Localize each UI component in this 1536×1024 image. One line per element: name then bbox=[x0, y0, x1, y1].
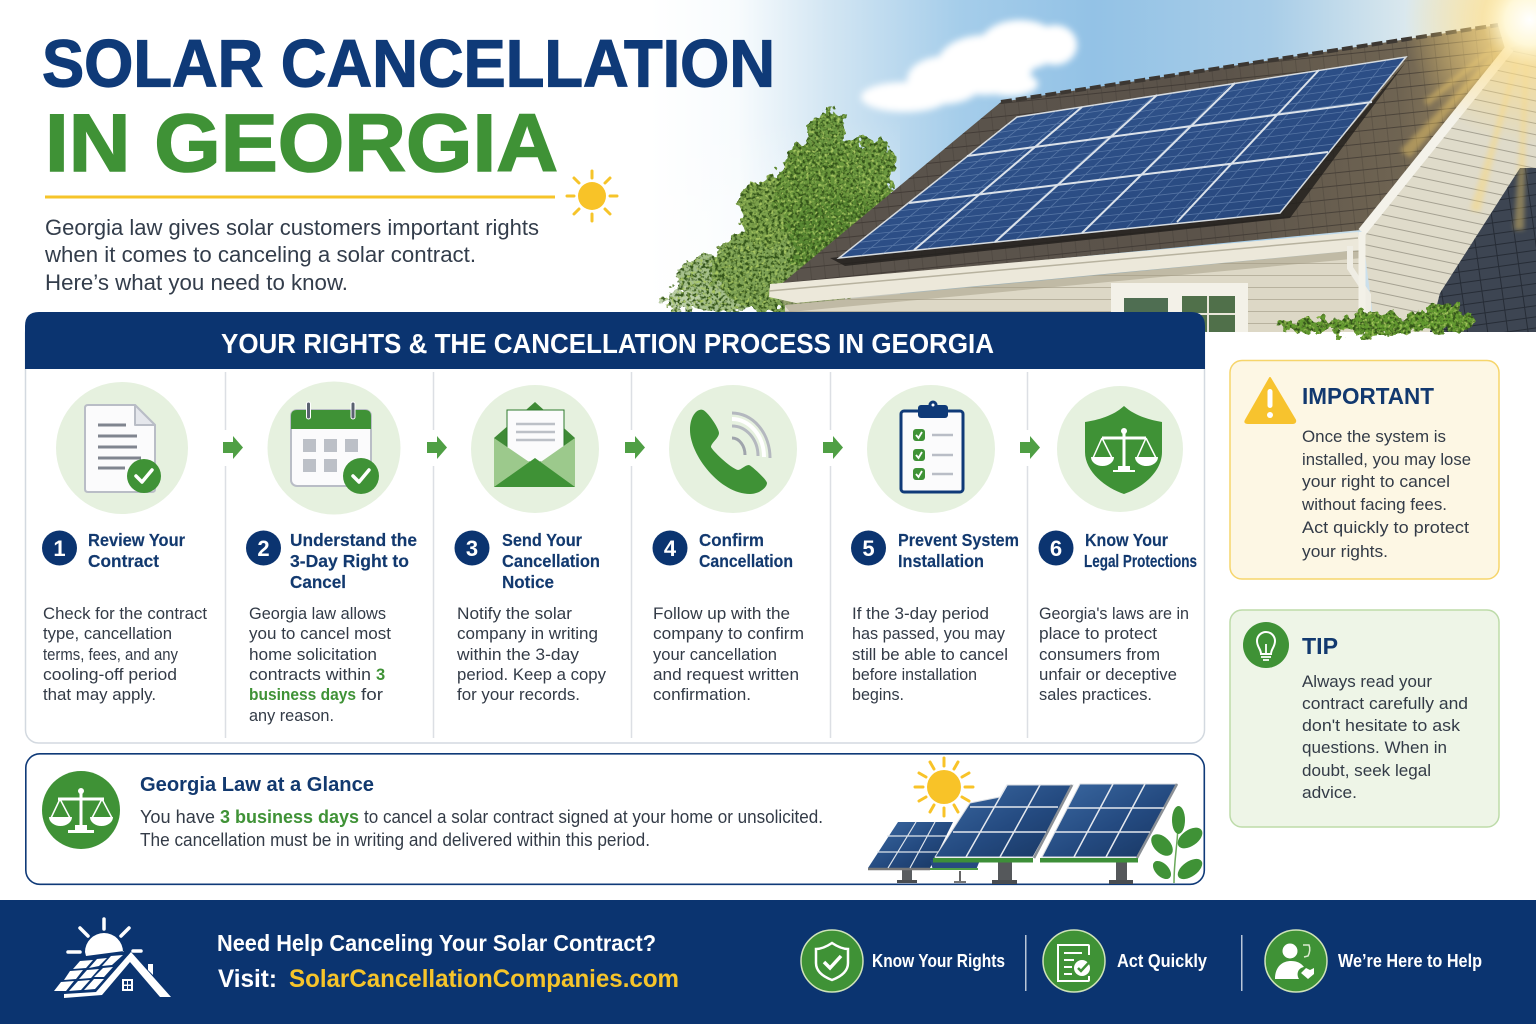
step 3 text bbox=[456, 605, 607, 704]
step 2 heading bbox=[290, 530, 417, 592]
important text: your rights. bbox=[1302, 542, 1388, 561]
step number 6 bbox=[1038, 530, 1074, 566]
middle panel bbox=[933, 785, 1073, 884]
important text: Act quickly to protect bbox=[1302, 518, 1469, 537]
step 6: know your legal protections bbox=[1038, 386, 1197, 704]
glance heading: Georgia Law at a Glance bbox=[140, 774, 374, 796]
important box bbox=[1230, 360, 1499, 579]
step 2 heading: Understand the bbox=[290, 530, 417, 550]
step 3 heading: Cancellation bbox=[502, 551, 600, 571]
step 3 heading bbox=[502, 530, 600, 592]
step 4 text bbox=[653, 605, 804, 704]
important text bbox=[1301, 427, 1471, 561]
plant bbox=[1147, 806, 1206, 883]
glance text: The cancellation must be in writing and delivered within this period. bbox=[140, 830, 650, 850]
gable siding bbox=[1362, 40, 1536, 332]
window bbox=[1111, 283, 1248, 332]
card body bbox=[26, 320, 1204, 743]
icon: small sun bbox=[567, 171, 617, 221]
step 1 text: Check for the contract bbox=[43, 605, 207, 623]
small panel bbox=[868, 822, 980, 883]
step number 1 bbox=[42, 530, 77, 566]
glance text: to cancel a solar contract signed at your home or unsolicited. bbox=[364, 807, 823, 827]
step 3 text: company in writing bbox=[457, 625, 598, 643]
footer call to action bbox=[217, 930, 679, 993]
footer badge: we're here to help bbox=[1265, 930, 1482, 992]
icon: solar house logo bbox=[54, 919, 171, 998]
panel: rights and cancellation process bbox=[25, 312, 1205, 743]
step 3 text: period. Keep a copy bbox=[457, 666, 607, 684]
step number 4 bbox=[652, 530, 688, 566]
panel: Georgia law at a glance bbox=[26, 754, 1206, 884]
step number 6: 6 bbox=[1050, 536, 1062, 561]
step 4 text: and request written bbox=[653, 666, 799, 684]
important heading: IMPORTANT bbox=[1302, 383, 1434, 409]
step 2 text: you to cancel most bbox=[249, 625, 391, 643]
step 4 text: company to confirm bbox=[653, 625, 804, 643]
icon: shield with scales bbox=[1057, 386, 1183, 512]
intro text: Here’s what you need to know. bbox=[45, 270, 348, 295]
step 3 text: Notify the solar bbox=[457, 605, 573, 623]
glance box bbox=[26, 754, 1204, 884]
house wall bbox=[780, 246, 1362, 332]
main roof bbox=[780, 25, 1506, 285]
step 4 text: Follow up with the bbox=[653, 605, 790, 623]
icon: clipboard checklist bbox=[867, 385, 995, 513]
step 1 heading bbox=[88, 530, 185, 571]
step 4 text: your cancellation bbox=[653, 646, 777, 664]
step 2 text: for bbox=[361, 686, 384, 704]
step 6 heading: Legal Protections bbox=[1084, 551, 1197, 571]
illustration: solar panels with sun and plant bbox=[868, 758, 1206, 884]
step 5 text bbox=[852, 605, 1008, 704]
step 5 heading bbox=[898, 530, 1019, 571]
step 3 text: within the 3-day bbox=[456, 646, 580, 664]
step 2 heading: Cancel bbox=[290, 572, 346, 592]
step 2 text: contracts within bbox=[249, 666, 371, 684]
step number 1: 1 bbox=[53, 536, 66, 561]
solar array bbox=[839, 57, 1406, 258]
panel header bar bbox=[25, 312, 1205, 369]
step number 3 bbox=[454, 530, 490, 566]
step number 3: 3 bbox=[466, 536, 478, 561]
tip text: advice. bbox=[1302, 783, 1357, 802]
step 6 text: place to protect bbox=[1039, 625, 1157, 643]
footer badge: act quickly: Act Quickly bbox=[1117, 951, 1207, 971]
arrow 5 to 6 bbox=[1017, 430, 1043, 466]
dark lower roof bbox=[1430, 168, 1536, 332]
sun glare bbox=[1400, 0, 1536, 230]
tip text: don't hesitate to ask bbox=[1302, 716, 1461, 735]
icon: open envelope bbox=[471, 385, 599, 513]
glance text: You have bbox=[140, 807, 215, 827]
step 2 text: Georgia law allows bbox=[249, 605, 386, 623]
step 1 heading: Contract bbox=[88, 551, 159, 571]
step 5 text: begins. bbox=[852, 686, 904, 704]
icon: calendar with check bbox=[268, 382, 400, 514]
gable fascia and gutter bbox=[769, 48, 1510, 332]
footer badge: know your rights bbox=[801, 930, 1005, 992]
bush bbox=[1274, 303, 1475, 335]
icon: light bulb bbox=[1243, 622, 1289, 668]
step number 4: 4 bbox=[664, 536, 677, 561]
intro text bbox=[44, 215, 539, 295]
step 3 heading: Notice bbox=[502, 572, 554, 592]
arrow 3 to 4 bbox=[622, 430, 648, 466]
intro text: when it comes to canceling a solar contract. bbox=[44, 242, 476, 267]
panel header bar: YOUR RIGHTS & THE CANCELLATION PROCESS IN GEORGIA bbox=[221, 328, 994, 359]
icon: warning triangle bbox=[1245, 378, 1295, 423]
step 4 heading: Cancellation bbox=[699, 551, 793, 571]
step number 2: 2 bbox=[257, 536, 270, 561]
step 5: prevent system installation bbox=[851, 385, 1019, 704]
step 2: understand the 3-day right bbox=[246, 382, 417, 725]
step 6 heading bbox=[1084, 530, 1197, 571]
step 1 text: that may apply. bbox=[43, 686, 156, 704]
title line 1: SOLAR CANCELLATION bbox=[42, 26, 775, 102]
step 1 text: cooling-off period bbox=[43, 666, 177, 684]
callout: tip bbox=[1230, 610, 1499, 827]
hero photo: house roof with solar panels bbox=[650, 0, 1536, 335]
tree bbox=[664, 111, 894, 314]
step 1 heading: Review Your bbox=[88, 530, 185, 550]
step 2 text bbox=[249, 605, 391, 725]
divider bbox=[1025, 935, 1026, 991]
right panel bbox=[1040, 784, 1177, 884]
arrow 2 to 3 bbox=[424, 430, 450, 466]
step 6 text: Georgia's laws are in bbox=[1039, 605, 1189, 623]
tip text: Always read your bbox=[1302, 672, 1432, 691]
tip text: doubt, seek legal bbox=[1302, 761, 1431, 780]
step 5 heading: Prevent System bbox=[898, 530, 1019, 550]
step 5 text: still be able to cancel bbox=[852, 646, 1008, 664]
step 3 heading: Send Your bbox=[502, 530, 582, 550]
step 2 text: 3 bbox=[376, 666, 385, 684]
step 2 text: business days bbox=[249, 686, 356, 704]
step 4 text: confirmation. bbox=[653, 686, 751, 704]
step number 2 bbox=[246, 530, 281, 566]
important text: your right to cancel bbox=[1302, 472, 1450, 491]
important text: without facing fees. bbox=[1301, 495, 1447, 514]
footer call to action: Need Help Canceling Your Solar Contract? bbox=[217, 930, 656, 956]
step 5 text: before installation bbox=[852, 666, 977, 684]
arrow 4 to 5 bbox=[820, 430, 846, 466]
icon: document with check bbox=[56, 382, 188, 514]
step number 5: 5 bbox=[862, 536, 875, 561]
step 5 text: If the 3-day period bbox=[852, 605, 989, 623]
step 1 text: terms, fees, and any bbox=[43, 646, 179, 664]
arrow 1 to 2 bbox=[220, 430, 246, 466]
step 2 heading: 3-Day Right to bbox=[290, 551, 409, 571]
step 5 text: has passed, you may bbox=[852, 625, 1006, 643]
step 4: confirm cancellation bbox=[652, 385, 804, 704]
glance text bbox=[140, 807, 823, 850]
title bbox=[42, 26, 775, 189]
step 1: review your contract bbox=[42, 382, 207, 704]
step 6 text: consumers from bbox=[1039, 646, 1160, 664]
important text: Once the system is bbox=[1302, 427, 1446, 446]
step 4 heading bbox=[699, 530, 793, 571]
tip box bbox=[1230, 610, 1499, 827]
step 3: send your cancellation notice bbox=[454, 385, 607, 704]
icon: phone with signal bbox=[669, 385, 797, 513]
footer badge: act quickly bbox=[1043, 930, 1207, 992]
step 6 heading: Know Your bbox=[1085, 530, 1168, 550]
step 5 heading: Installation bbox=[898, 551, 984, 571]
step 3 text: for your records. bbox=[457, 686, 580, 704]
step 2 text: home solicitation bbox=[249, 646, 377, 664]
callout: important bbox=[1230, 360, 1499, 579]
panel shadow bbox=[830, 62, 1406, 266]
sky bbox=[650, 0, 1536, 332]
glance text: 3 business days bbox=[220, 807, 359, 827]
sun bbox=[915, 758, 973, 816]
footer badge: know your rights: Know Your Rights bbox=[872, 951, 1005, 971]
intro text: Georgia law gives solar customers important rights bbox=[45, 215, 539, 240]
divider bbox=[1241, 935, 1242, 991]
step 6 text: sales practices. bbox=[1039, 686, 1152, 704]
tip text: contract carefully and bbox=[1302, 694, 1468, 713]
step 6 text: unfair or deceptive bbox=[1039, 666, 1177, 684]
step 1 text bbox=[43, 605, 207, 704]
step 4 heading: Confirm bbox=[699, 530, 764, 550]
step 1 text: type, cancellation bbox=[43, 625, 172, 643]
footer band bbox=[0, 900, 1536, 1024]
footer call to action: SolarCancellationCompanies.com bbox=[289, 965, 679, 993]
footer call to action: Visit: bbox=[218, 965, 277, 993]
tip text bbox=[1302, 672, 1468, 802]
tip text: questions. When in bbox=[1302, 738, 1447, 757]
cloud bbox=[861, 20, 1077, 112]
title line 2: IN GEORGIA bbox=[45, 98, 558, 189]
title rule bbox=[45, 196, 555, 198]
step 2 text: any reason. bbox=[249, 707, 334, 725]
step number 5 bbox=[851, 530, 886, 566]
important text: installed, you may lose bbox=[1302, 450, 1471, 469]
tip heading: TIP bbox=[1302, 633, 1338, 659]
step 6 text bbox=[1039, 605, 1189, 704]
icon: scales of justice bbox=[42, 771, 120, 849]
footer badge: we're here to help: We’re Here to Help bbox=[1338, 951, 1482, 971]
